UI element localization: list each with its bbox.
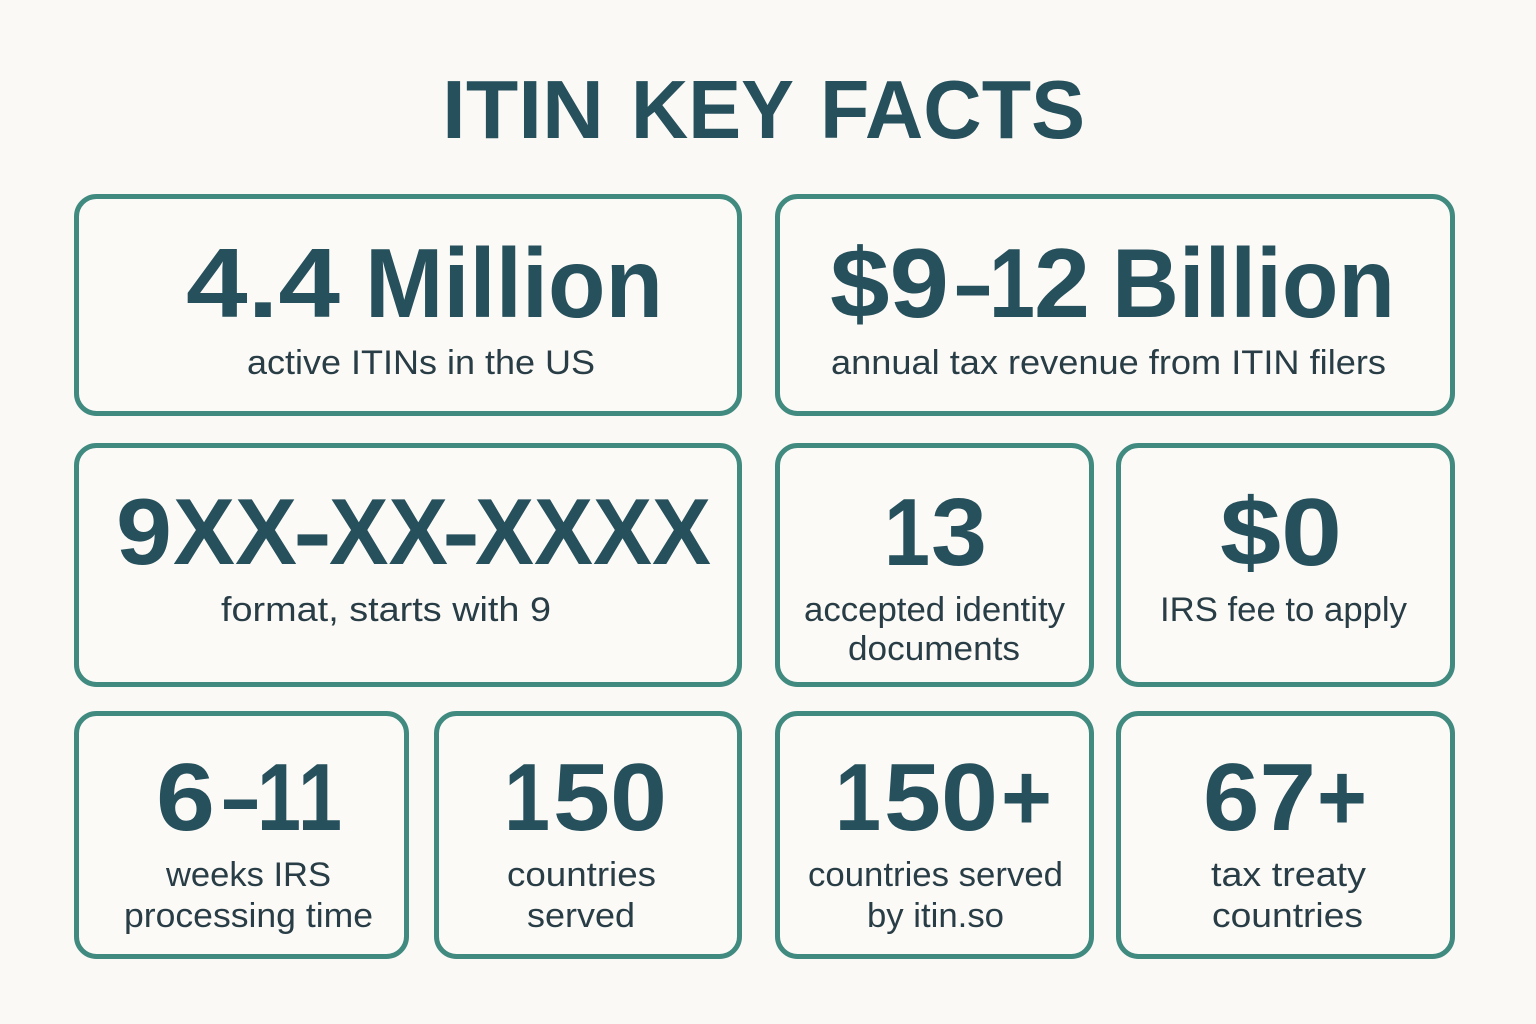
title: ITIN	[442, 63, 604, 156]
panel: active ITINs	[76, 196, 740, 414]
label: accepted identity documents	[804, 591, 1065, 668]
stat: 150+: 1	[835, 744, 881, 851]
label: countries served by itin.so	[808, 856, 1063, 935]
label: countries served by itin.so: by itin.so	[867, 897, 1004, 935]
stat: $9-12 Billion: $9	[830, 228, 949, 338]
label: weeks IRS processing time	[124, 856, 373, 935]
label: countries served: countries	[507, 856, 656, 894]
panel: tax revenue	[778, 196, 1452, 414]
stat: 67+: 67	[1203, 744, 1316, 851]
stat: $9-12 Billion: 2	[1034, 228, 1090, 338]
stat: 13: 1	[884, 479, 930, 586]
stat: 6-11: 1	[298, 744, 342, 851]
label: countries served	[507, 856, 656, 935]
label: weeks IRS processing time: processing time	[124, 897, 373, 935]
panel: processing time	[76, 714, 406, 956]
stat: 150+: +	[1001, 744, 1052, 851]
panel: identity documents	[778, 446, 1092, 684]
stat: 150: 50	[553, 744, 667, 851]
panel: format	[76, 446, 740, 684]
stat: $9-12 Billion	[830, 228, 1395, 338]
stat: 4.4 Million: 4.4	[186, 228, 340, 338]
stat: 13	[884, 479, 987, 586]
title: KEY	[631, 63, 794, 156]
stat: 150: 1	[504, 744, 550, 851]
stat: 6-11: 1	[257, 744, 301, 851]
label: countries served: served	[527, 897, 635, 935]
stat: 6-11	[156, 744, 342, 851]
stat: $0: $0	[1220, 479, 1342, 586]
stat: 9XX-XX-XXXX: XXXX	[475, 479, 711, 584]
stat: 150+: 50	[884, 744, 998, 851]
stat: $9-12 Billion: 1	[989, 228, 1035, 338]
stat: 9XX-XX-XXXX	[116, 479, 711, 584]
stat: 67+	[1203, 744, 1367, 851]
stat: 150	[504, 744, 667, 851]
label: accepted identity documents: accepted identity	[804, 591, 1065, 629]
stat: 6-11: –	[222, 744, 259, 851]
stat: 9XX-XX-XXXX: -	[293, 479, 332, 584]
label: tax treaty countries: tax treaty	[1211, 856, 1366, 894]
panel: IRS fee	[1118, 446, 1452, 684]
stat: $9-12 Billion: Billion	[1112, 228, 1395, 338]
label: accepted identity documents: documents	[848, 630, 1020, 668]
label: IRS fee: IRS fee to apply	[1160, 591, 1407, 629]
stat: 6-11: 6	[156, 744, 215, 851]
panel: tax treaty countries	[1118, 714, 1452, 956]
stat: 13: 3	[931, 479, 987, 586]
stat: 9XX-XX-XXXX: XX	[173, 479, 297, 584]
stat: 9XX-XX-XXXX: XX	[329, 479, 448, 584]
label: tax treaty countries	[1211, 856, 1366, 935]
stat: 4.4 Million	[186, 228, 663, 338]
label: weeks IRS processing time: weeks IRS	[165, 856, 331, 894]
label: active ITINs: active ITINs in the US	[247, 344, 595, 382]
stat: 4.4 Million: Million	[365, 228, 663, 338]
label: tax treaty countries: countries	[1212, 897, 1363, 935]
stat: 9XX-XX-XXXX: 9	[116, 479, 172, 584]
panel: countries served	[436, 714, 740, 956]
panel: countries served by itin.so	[778, 714, 1092, 956]
label: tax revenue: annual tax revenue from ITIN filers	[831, 344, 1386, 382]
title	[442, 63, 1085, 156]
label: countries served by itin.so: countries served	[808, 856, 1063, 894]
stat: 9XX-XX-XXXX: -	[442, 479, 480, 584]
title: FACTS	[820, 63, 1085, 156]
label: format: format, starts with 9	[221, 591, 551, 629]
stat: 150+	[835, 744, 1052, 851]
stat: 67+: +	[1317, 744, 1367, 851]
stat: $9-12 Billion: –	[955, 228, 991, 338]
